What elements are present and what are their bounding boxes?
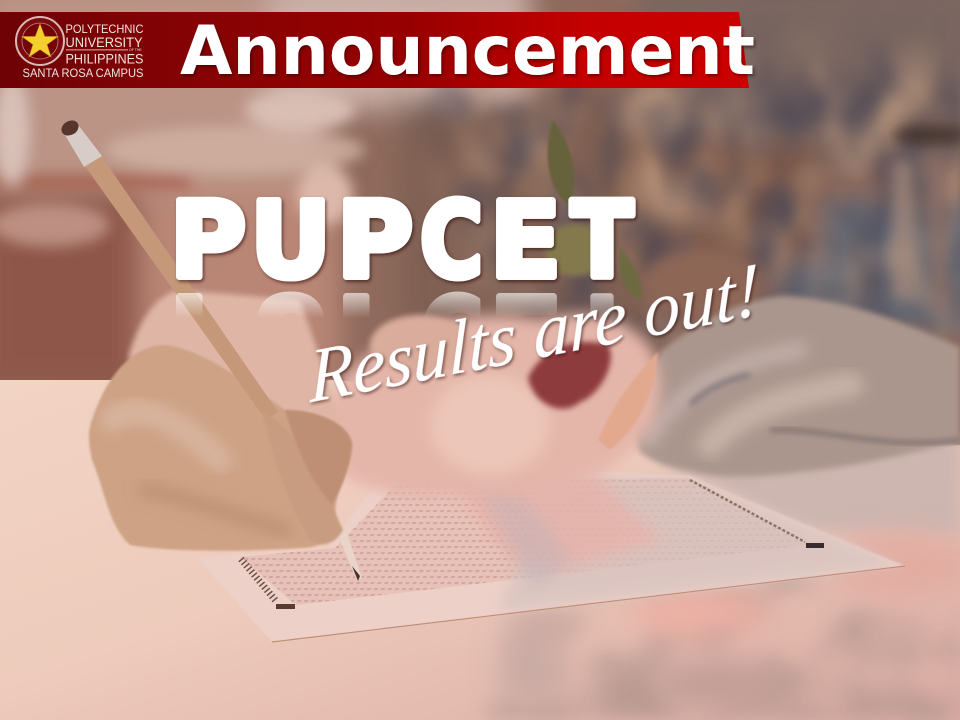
heading: PUPCET: T — [571, 180, 633, 302]
logo wordmark — [22, 22, 144, 80]
right hand — [634, 296, 960, 477]
table surface — [0, 380, 960, 720]
icon: university seal — [16, 17, 64, 65]
heading reflection: T — [571, 272, 633, 394]
pencil — [59, 117, 362, 581]
background photo: upper scene — [0, 0, 960, 445]
logo wordmark: OF THE — [129, 48, 142, 52]
heading reflection — [176, 292, 614, 316]
heading reflection: E — [490, 272, 561, 394]
heading: PUPCET — [175, 196, 639, 316]
heading reflection: U — [251, 272, 331, 394]
flower blossom overlay — [320, 120, 660, 496]
heading: PUPCET: C — [420, 180, 483, 302]
timing marks — [241, 559, 276, 601]
heading reflection: P — [170, 272, 246, 394]
header ribbon — [0, 12, 755, 91]
heading: PUPCET: P — [170, 180, 246, 302]
logo wordmark: UNIVERSITY — [66, 34, 143, 50]
writing hand — [89, 290, 352, 551]
logo wordmark: SANTA ROSA CAMPUS — [22, 66, 144, 80]
answer sheet — [197, 440, 905, 642]
logo wordmark: PHILIPPINES — [66, 50, 144, 66]
heading: PUPCET: U — [251, 180, 331, 302]
heading: PUPCET: E — [490, 180, 561, 302]
heading: PUPCET: P — [337, 180, 413, 302]
subheading: Results are out!: Results are out! — [308, 246, 760, 419]
heading reflection: C — [420, 272, 483, 394]
writing hand: index finger and thumb — [262, 410, 352, 544]
heading reflection: P — [337, 272, 413, 394]
background: right table and lower-right blurred flowers — [484, 440, 960, 720]
title: Announcement: Announcement — [180, 12, 755, 91]
logo wordmark: POLYTECHNIC — [66, 22, 144, 36]
